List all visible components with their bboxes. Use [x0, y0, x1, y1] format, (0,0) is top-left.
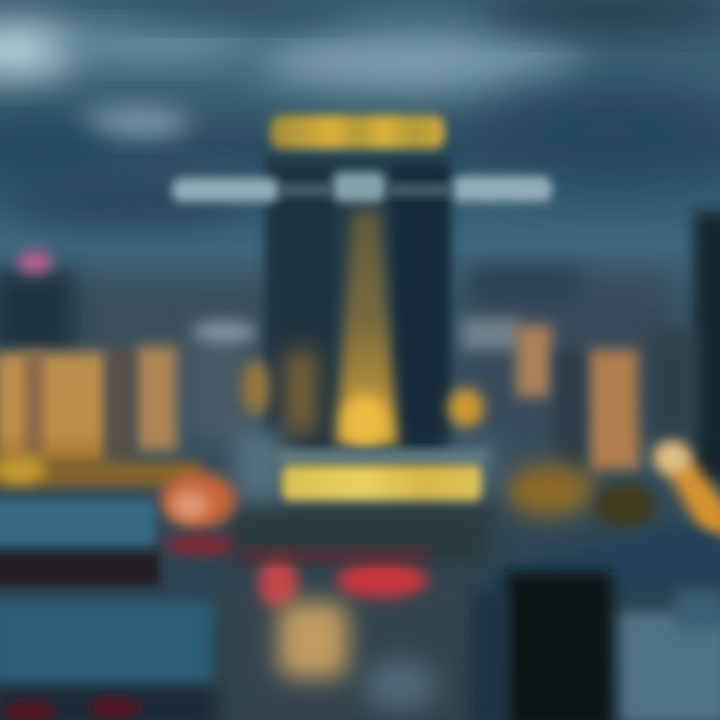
- orange tower far: [588, 350, 640, 470]
- road and traffic: [164, 535, 472, 720]
- central spire: [336, 210, 398, 445]
- right column: [392, 165, 448, 445]
- orange tower near: [516, 325, 552, 397]
- street level mid ground: [230, 430, 500, 565]
- dark base: [0, 688, 225, 720]
- blue roof right: [500, 525, 720, 600]
- dark building: [505, 572, 613, 720]
- left buildings: [0, 250, 257, 486]
- left column: [270, 165, 334, 445]
- orange lit tower: [136, 346, 178, 451]
- golden podium: [278, 450, 488, 501]
- lower left foreground: [0, 500, 225, 720]
- central tower: [266, 115, 450, 450]
- distant skyline haze: [60, 268, 680, 440]
- tower side glows: [242, 360, 484, 428]
- dark right tower: [694, 212, 720, 482]
- spire bright base: [343, 395, 387, 445]
- grey tower: [190, 320, 250, 440]
- blue roof: [0, 500, 155, 546]
- pale gold vehicle glow: [278, 602, 348, 678]
- street glow: [505, 464, 595, 516]
- left column glow: [285, 350, 317, 435]
- golden crown: [270, 115, 445, 149]
- pale blue building: [620, 612, 720, 720]
- teal lower building: [0, 600, 215, 686]
- street glow: [0, 462, 200, 486]
- orange street glow left: [160, 472, 236, 528]
- diagonal orange highway: [655, 445, 720, 545]
- dark band: [0, 552, 160, 586]
- lower right foreground: [472, 525, 720, 720]
- right buildings: [462, 212, 720, 545]
- pink rooftop sign: [17, 250, 53, 274]
- blurred sign band: [172, 172, 552, 202]
- orange lit facade: [0, 352, 107, 467]
- grey tower: [462, 318, 520, 350]
- red base lights: [4, 700, 56, 720]
- gap between buildings: [108, 350, 132, 460]
- tower shaft shadow: [266, 155, 450, 450]
- storm clouds: [0, 0, 720, 230]
- dark rooftop block: [0, 270, 75, 355]
- dark shaft: [555, 350, 585, 470]
